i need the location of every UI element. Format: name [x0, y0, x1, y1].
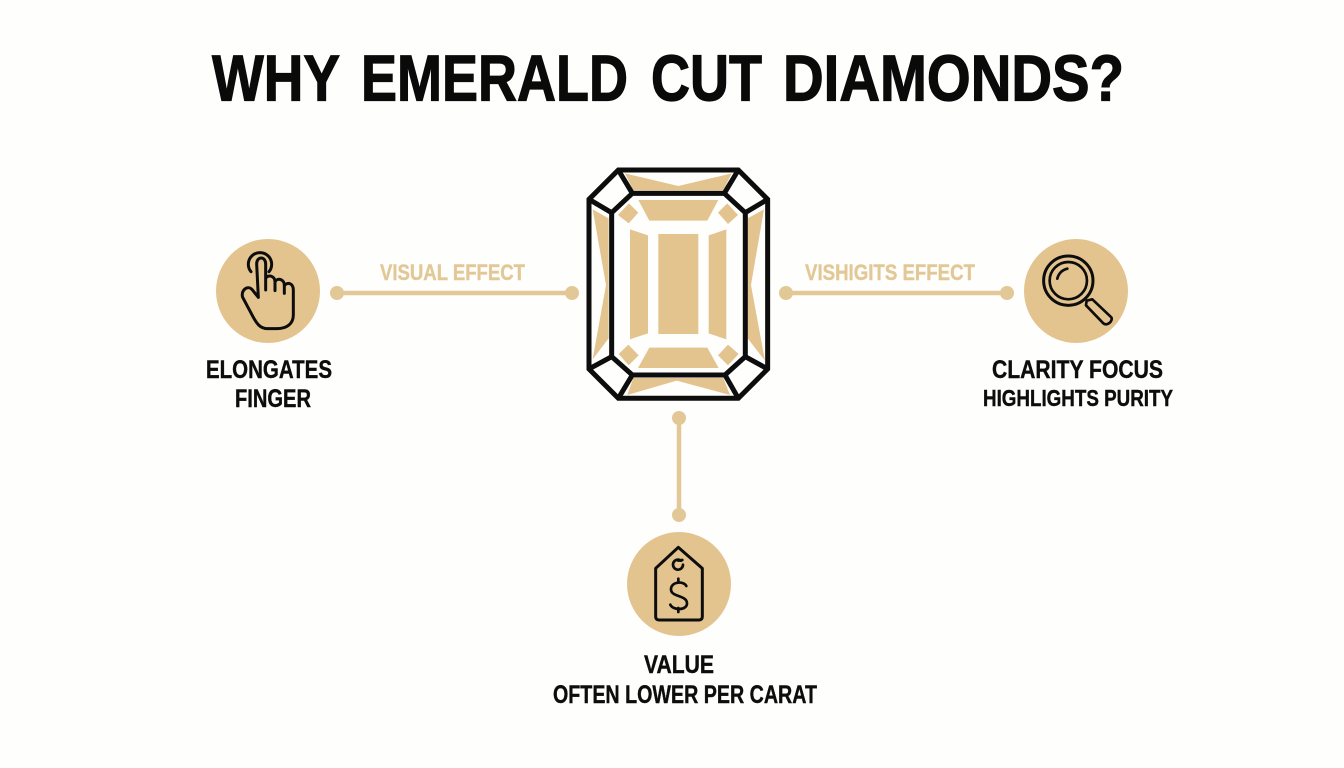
title — [212, 42, 1124, 114]
icon: magnifying glass — [1024, 239, 1128, 343]
label: elongates finger — [206, 356, 332, 413]
left connector label: VISUAL EFFECT — [380, 260, 525, 285]
diamond gold facets — [593, 173, 765, 395]
label: value — [553, 651, 817, 709]
label: elongates finger: FINGER — [235, 385, 311, 413]
label: clarity focus: HIGHLIGHTS PURITY — [983, 385, 1173, 411]
bottom connector — [672, 411, 686, 522]
right connector: highlights effect — [779, 260, 1014, 300]
label: value: OFTEN LOWER PER CARAT — [553, 681, 817, 709]
title: EMERALD — [361, 42, 628, 114]
diamond black outlines — [589, 170, 768, 398]
label: clarity focus — [983, 356, 1173, 411]
title: CUT — [651, 42, 762, 114]
title: WHY — [212, 42, 340, 114]
label: clarity focus: CLARITY FOCUS — [992, 356, 1163, 384]
left connector: visual effect — [330, 260, 579, 300]
central emerald cut diamond — [589, 170, 768, 398]
icon: price tag — [627, 532, 731, 636]
title: DIAMONDS? — [783, 42, 1124, 114]
label: value: VALUE — [644, 651, 714, 679]
label: elongates finger: ELONGATES — [206, 356, 332, 384]
icon: finger tap — [216, 239, 320, 343]
right connector label: VISHIGITS EFFECT — [805, 260, 975, 285]
